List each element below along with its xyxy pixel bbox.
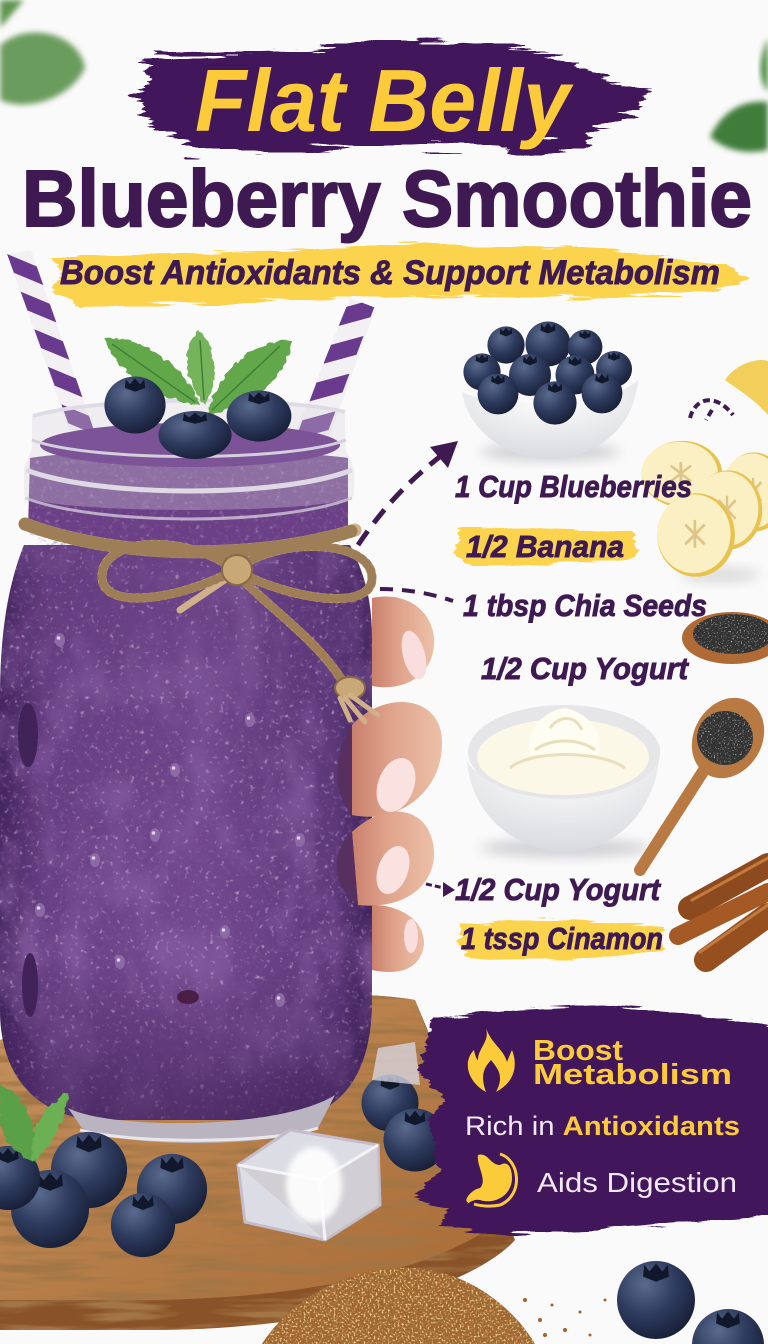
mason jar with smoothie bbox=[0, 400, 380, 1143]
jar body bbox=[0, 545, 372, 1120]
banana slices bbox=[642, 360, 768, 583]
text: Rich in Antioxidants: Rich in Antioxidants bbox=[465, 1111, 740, 1141]
blueberries on board bbox=[0, 1074, 764, 1344]
icon: flame bbox=[468, 1028, 515, 1092]
jar rim glass bbox=[24, 400, 354, 510]
jar base bbox=[68, 1095, 335, 1143]
straw right bbox=[298, 298, 376, 434]
cinnamon highlight bbox=[458, 920, 666, 960]
yogurt bowl bbox=[467, 705, 660, 857]
wooden spoon with chia seeds bbox=[640, 685, 768, 870]
icon: stomach bbox=[466, 1154, 517, 1206]
cinnamon sticks bbox=[678, 858, 768, 960]
chia spoon small bbox=[682, 612, 768, 664]
text: Aids Digestion: Aids Digestion bbox=[537, 1167, 737, 1198]
straw left bbox=[7, 250, 94, 430]
subtitle: Boost Antioxidants & Support Metabolism bbox=[60, 254, 720, 292]
hand bbox=[337, 596, 442, 972]
title: Flat Belly: Flat Belly bbox=[195, 51, 574, 150]
title: Blueberry Smoothie: Blueberry Smoothie bbox=[22, 154, 752, 243]
mint on board bbox=[0, 1085, 68, 1162]
text: Boost Metabolism bbox=[533, 1035, 732, 1091]
ice cube bbox=[238, 1130, 380, 1240]
large droplets bbox=[170, 763, 180, 777]
ingredient: 1 tbsp Chia Seeds: 1 tbsp Chia Seeds bbox=[463, 588, 707, 623]
ingredient: 1/2 Cup Yogurt repeat: 1/2 Cup Yogurt bbox=[455, 872, 662, 907]
ingredient: 1/2 Cup Yogurt: 1/2 Cup Yogurt bbox=[481, 651, 690, 686]
text: Boost Metabolism: Boost bbox=[533, 1035, 623, 1067]
banana highlight bbox=[454, 527, 638, 566]
small curled arrow bbox=[690, 400, 733, 420]
subtitle brush bbox=[50, 244, 748, 306]
ingredient: 1/2 Banana: 1/2 Banana bbox=[466, 529, 624, 564]
jar garnish: blueberries and mint bbox=[104, 330, 292, 459]
jar neck and smoothie bbox=[28, 450, 348, 546]
text: Boost Metabolism: Metabolism bbox=[533, 1059, 732, 1091]
arrow to second yogurt line bbox=[426, 882, 455, 897]
brush background bbox=[414, 1006, 768, 1234]
title brush banner bbox=[134, 40, 648, 154]
wooden board bbox=[0, 990, 520, 1335]
blurred mint leaves in corners bbox=[0, 0, 768, 152]
twine bow bbox=[25, 524, 378, 722]
dashed line to chia seeds bbox=[380, 589, 453, 601]
ingredient: 1 tssp Cinamon: 1 tssp Cinamon bbox=[461, 921, 663, 956]
ingredient: 1 Cup Blueberries: 1 Cup Blueberries bbox=[455, 469, 692, 504]
dashed arrow to blueberries bbox=[358, 441, 458, 545]
ground spices bbox=[262, 1268, 606, 1344]
blueberry bowl bbox=[462, 322, 638, 461]
small ice cube bbox=[372, 1042, 420, 1085]
benefits panel bbox=[414, 1006, 768, 1234]
